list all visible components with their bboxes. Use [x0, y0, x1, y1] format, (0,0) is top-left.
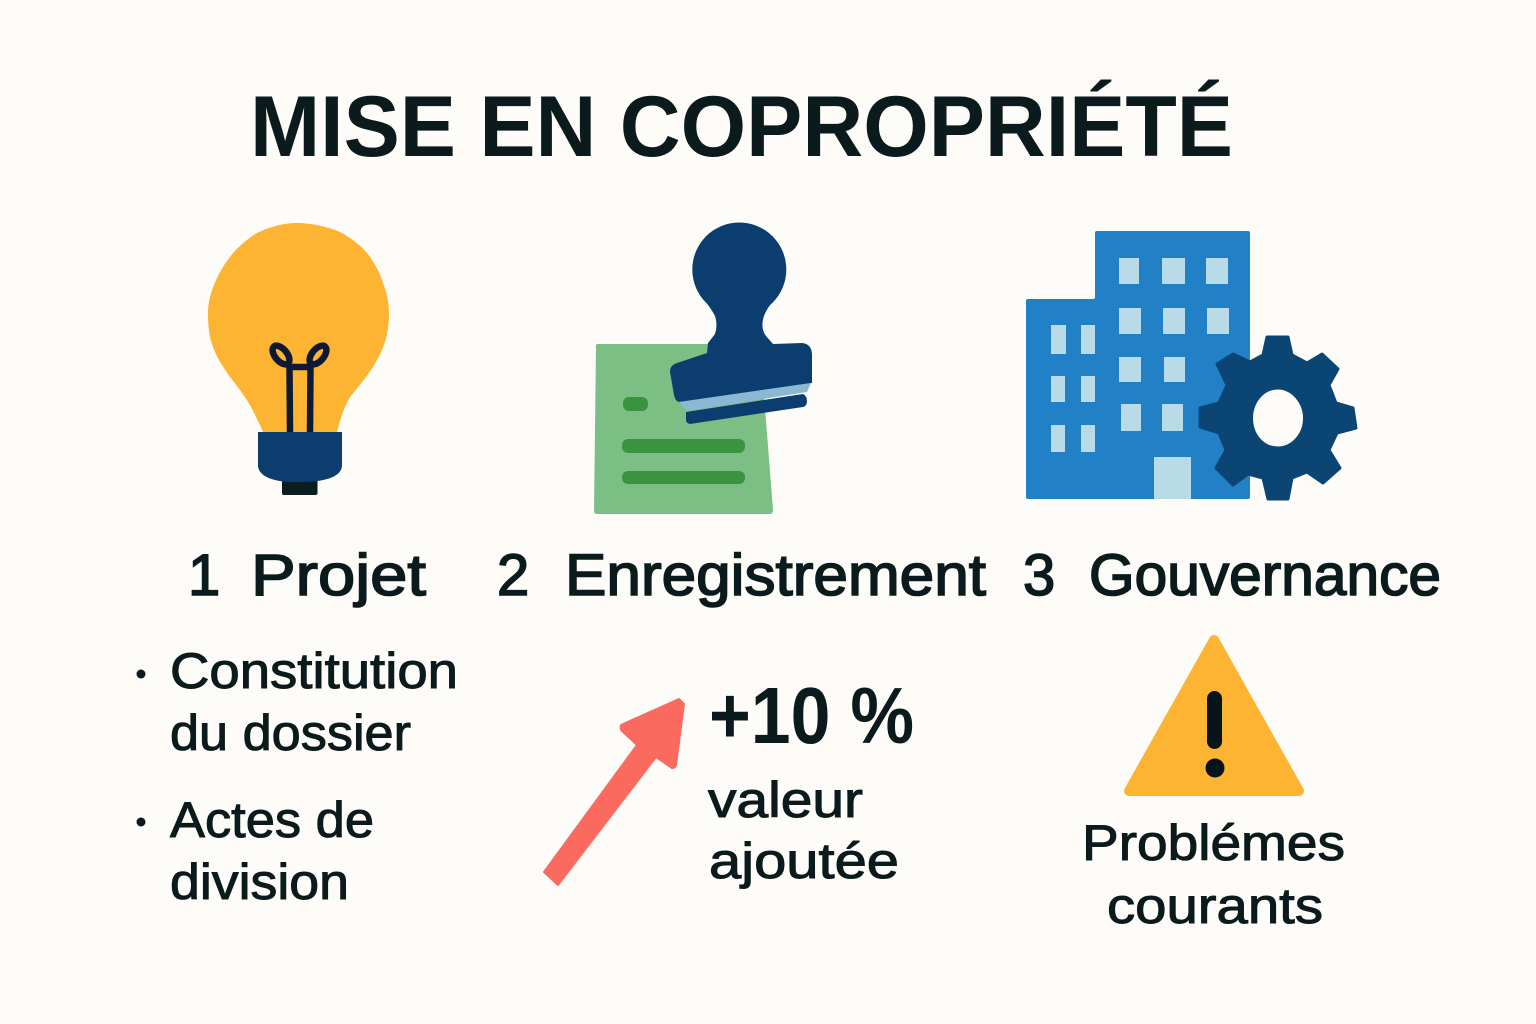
icon: stamp on document	[594, 222, 812, 514]
heading: step 3: 3	[1023, 543, 1055, 608]
document	[594, 344, 773, 514]
warning label: courants	[1107, 878, 1323, 934]
icon: building with gear	[1026, 231, 1356, 499]
heading: step 1: Projet	[251, 543, 426, 608]
heading: step 2: Enregistrement	[565, 543, 986, 608]
bullet list: division	[170, 854, 349, 910]
gear	[1200, 337, 1356, 499]
heading: step 3: Gouvernance	[1089, 543, 1441, 608]
stat: +10 % value	[708, 671, 914, 889]
heading: step 2: 2	[497, 543, 529, 608]
bullet list	[136, 643, 458, 910]
warning label	[1082, 815, 1345, 934]
bullet list: Constitution	[170, 643, 458, 699]
stat: +10 % value: +10 %	[709, 671, 914, 760]
arrow: upward	[544, 699, 684, 885]
stat: +10 % value: valeur	[708, 772, 863, 828]
building	[1026, 231, 1250, 499]
stat: +10 % value: ajoutée	[709, 833, 899, 889]
heading: step 1	[188, 543, 426, 608]
title: MISE EN COPROPRIÉTÉ	[250, 79, 1233, 175]
stamp	[692, 222, 786, 316]
heading: step 1: 1	[188, 543, 220, 608]
bullet list: du dossier	[170, 705, 411, 761]
warning label: Problémes	[1082, 815, 1345, 871]
windows	[1051, 258, 1229, 499]
icon: warning triangle	[1129, 640, 1299, 791]
icon: light bulb	[208, 223, 389, 495]
bullet list: Actes de	[170, 792, 374, 848]
